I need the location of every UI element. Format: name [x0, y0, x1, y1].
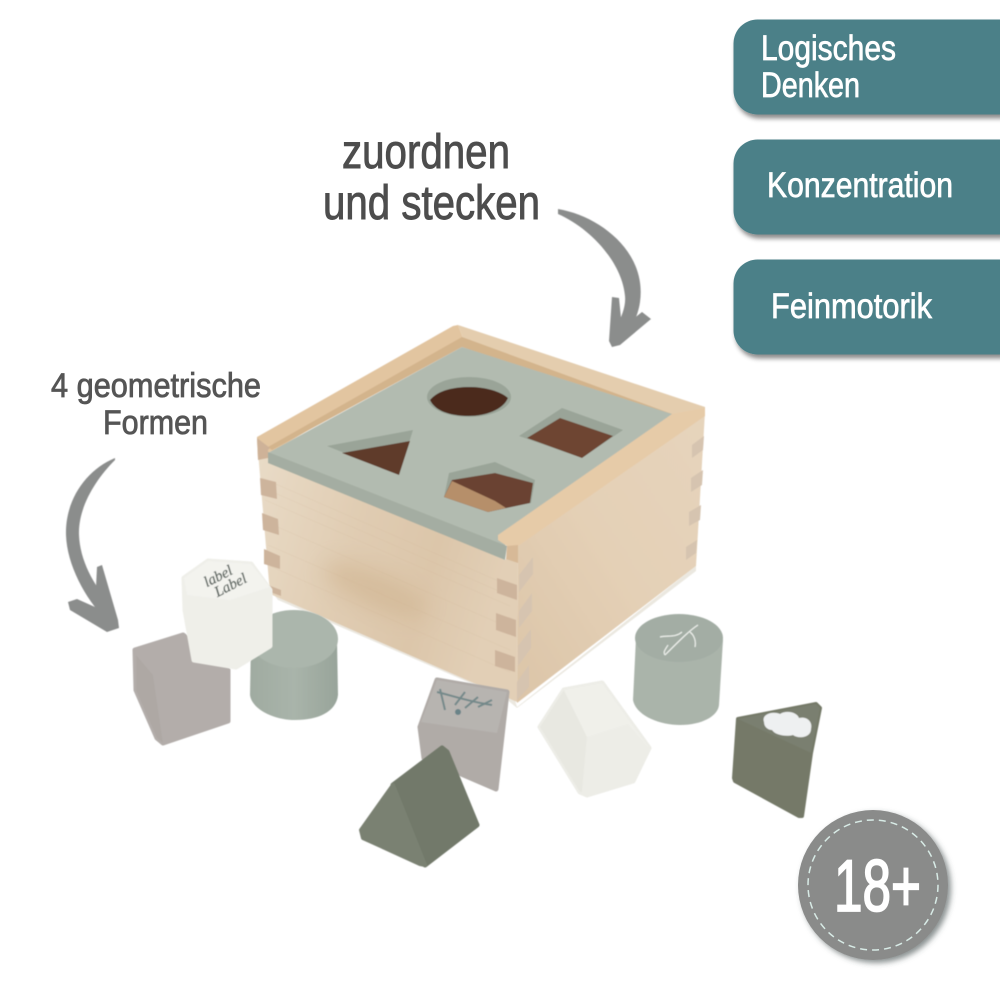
corner post — [506, 545, 518, 563]
button: Logisches Denken: Denken — [761, 66, 860, 105]
hole: circle — [427, 377, 511, 417]
button: Konzentration — [734, 140, 1000, 234]
grey cube piece — [135, 635, 228, 743]
cloud print — [764, 712, 811, 737]
leaf print — [660, 625, 698, 655]
grey cube piece with olive branch — [420, 680, 507, 789]
hole: triangle — [327, 430, 413, 475]
olive wedge piece with cloud — [734, 704, 820, 816]
label script: Label — [211, 571, 250, 601]
hole: pentagon — [444, 462, 535, 512]
finger joints — [260, 436, 704, 700]
right wall top — [498, 408, 705, 546]
olive triangle piece — [361, 748, 477, 865]
heading: zuordnen und stecken: zuordnen — [342, 126, 510, 179]
arrow: towards pieces — [66, 458, 119, 632]
button: Feinmotorik: Feinmotorik — [771, 287, 932, 326]
end grain left — [257, 438, 270, 460]
white hexagon piece right — [540, 683, 649, 795]
wooden shape-sorter box — [257, 325, 705, 708]
age badge 18+: 18+ — [834, 846, 921, 927]
inner wall shadow — [268, 337, 672, 450]
button: Logisches Denken: Logisches — [761, 29, 896, 68]
olive branch print — [437, 689, 492, 715]
label: 4 geometrische Formen: Formen — [103, 404, 208, 442]
button: Logisches Denken — [734, 20, 1000, 114]
box front face — [257, 440, 518, 702]
age badge 18+ — [798, 810, 948, 960]
front face shading and grain — [322, 556, 420, 620]
heading: zuordnen und stecken — [323, 126, 540, 230]
label script: label — [201, 563, 235, 591]
white hexagon piece with label — [184, 561, 270, 667]
box right face — [517, 412, 705, 703]
heading: zuordnen und stecken: und stecken — [323, 177, 540, 230]
arrow: towards box — [558, 209, 651, 347]
cylinder piece with leaf — [633, 614, 723, 725]
button: Feinmotorik — [734, 260, 1000, 354]
label: 4 geometrische Formen — [51, 367, 261, 442]
lid front edge — [268, 452, 507, 560]
back rim right — [458, 325, 705, 415]
button: Konzentration: Konzentration — [767, 166, 953, 205]
lid top — [268, 347, 672, 547]
label script — [201, 563, 250, 601]
cylinder piece behind — [250, 610, 338, 720]
label: 4 geometrische Formen: 4 geometrische — [51, 367, 261, 405]
back rim left — [257, 325, 463, 458]
box base strip — [272, 566, 696, 708]
hole: square — [519, 408, 623, 458]
